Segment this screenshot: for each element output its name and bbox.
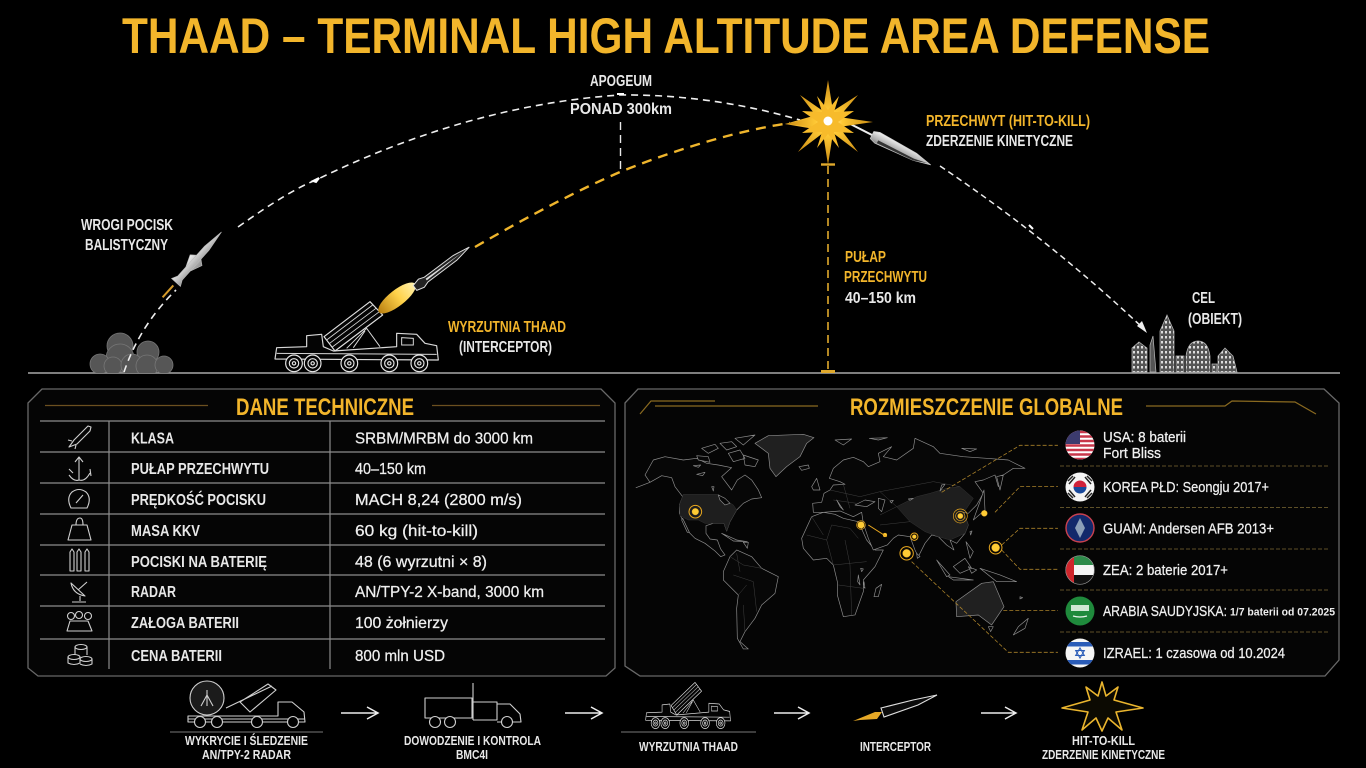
step 5: hit-to-kill: HIT-TO-KILL xyxy=(1072,733,1135,748)
panel: technical data xyxy=(28,389,615,676)
interceptor trajectory xyxy=(475,123,790,247)
row: missile speed: MACH 8,24 (2800 m/s) xyxy=(355,492,522,509)
row: missile speed: PRĘDKOŚĆ POCISKU xyxy=(131,490,266,509)
trajectory tick marks xyxy=(313,94,1033,229)
row: battery crew: ZAŁOGA BATERII xyxy=(131,615,239,632)
enemy missile xyxy=(157,227,227,303)
row: battery price: 800 mln USD xyxy=(355,648,445,665)
icon: missiles xyxy=(70,549,89,571)
panel heading: ROZMIESZCZENIE GLOBALNE xyxy=(850,394,1123,421)
flag: Guam xyxy=(1066,514,1094,542)
icon: altitude arrow xyxy=(69,457,91,480)
descending debris missile xyxy=(848,119,934,170)
apogee label: PONAD 300km xyxy=(570,101,672,118)
row: battery price xyxy=(131,648,445,665)
step 1: radar truck: WYKRYCIE I ŚLEDZENIE xyxy=(185,733,308,748)
row: KKV mass xyxy=(131,523,478,540)
row: class: KLASA xyxy=(131,430,174,448)
label: Israel: IZRAEL: 1 czasowa od 10.2024 xyxy=(1103,645,1285,662)
Americas and Greenland xyxy=(636,434,814,649)
icon: missile xyxy=(68,426,91,449)
row: radar: AN/TPY-2 X-band, 3000 km xyxy=(355,584,544,601)
list separators xyxy=(1060,466,1330,632)
step 3: launcher: WYRZUTNIA THAAD xyxy=(639,739,738,754)
flag: Saudi Arabia xyxy=(1066,596,1094,626)
launcher label xyxy=(448,319,566,356)
row: radar: RADAR xyxy=(131,584,176,601)
panel heading: DANE TECHNICZNE xyxy=(236,394,414,421)
row: intercept altitude xyxy=(131,461,426,478)
flag: Israel xyxy=(1065,638,1095,668)
row: radar xyxy=(131,584,544,601)
panel: global deployment xyxy=(625,389,1339,676)
intercept altitude label xyxy=(844,249,927,307)
intercept altitude label: PRZECHWYTU xyxy=(844,269,927,286)
label: USA: Fort Bliss xyxy=(1103,445,1161,462)
label: Saudi Arabia: 1/7 baterii od 07.2025 xyxy=(1230,606,1335,618)
descending arrowhead xyxy=(1137,321,1147,333)
step 3: launcher xyxy=(621,682,756,754)
apogee label: APOGEUM xyxy=(590,73,652,90)
flag: South Korea xyxy=(1065,472,1095,502)
label: Guam: GUAM: Andersen AFB 2013+ xyxy=(1103,520,1274,538)
row: battery price: CENA BATERII xyxy=(131,648,222,665)
row: battery crew xyxy=(131,615,448,632)
target label xyxy=(1188,290,1242,328)
descending trajectory xyxy=(940,166,1145,330)
step 2: command truck: BMC4I xyxy=(456,747,488,762)
panel frame xyxy=(28,389,615,676)
step 1: radar truck xyxy=(170,681,323,762)
label: Saudi Arabia: ARABIA SAUDYJSKA: xyxy=(1103,603,1227,620)
intercept label: ZDERZENIE KINETYCZNE xyxy=(926,133,1073,150)
world map xyxy=(636,434,1058,652)
row: KKV mass: 60 kg (hit-to-kill) xyxy=(355,523,478,540)
interceptor missile xyxy=(412,243,472,292)
target label: CEL xyxy=(1192,290,1215,307)
process flow xyxy=(170,681,1165,762)
row: KKV mass: MASA KKV xyxy=(131,523,200,540)
launcher label: WYRZUTNIA THAAD xyxy=(448,319,566,336)
step 5: hit-to-kill xyxy=(1042,682,1165,762)
step 2: command truck xyxy=(404,683,541,762)
target city skyline xyxy=(1132,315,1237,372)
flag: UAE xyxy=(1065,555,1095,585)
row: missiles per battery xyxy=(131,554,487,571)
row: class: SRBM/MRBM do 3000 km xyxy=(355,430,533,448)
intercept label: PRZECHWYT (HIT-TO-KILL) xyxy=(926,113,1090,130)
row: missiles per battery: POCISKI NA BATERIĘ xyxy=(131,554,267,571)
callout lines xyxy=(912,445,1058,652)
intercept altitude label: PUŁAP xyxy=(845,249,886,266)
step 2: command truck: DOWODZENIE I KONTROLA xyxy=(404,733,541,748)
step 5: hit-to-kill: ZDERZENIE KINETYCZNE xyxy=(1042,747,1165,762)
enemy missile label: WROGI POCISK xyxy=(81,217,173,234)
icon: crew xyxy=(67,612,92,631)
apogee altitude marker xyxy=(620,122,622,172)
intercept altitude line xyxy=(821,164,835,372)
label: Saudi Arabia xyxy=(1103,603,1335,620)
icon: radar dish xyxy=(71,582,87,602)
row: missiles per battery: 48 (6 wyrzutni × 8) xyxy=(355,554,487,571)
label: UAE: ZEA: 2 baterie 2017+ xyxy=(1103,562,1228,579)
row: battery crew: 100 żołnierzy xyxy=(355,615,448,632)
explosion xyxy=(785,80,873,165)
enemy missile label xyxy=(81,217,173,254)
label: South Korea: KOREA PŁD: Seongju 2017+ xyxy=(1103,479,1269,496)
trajectory diagram xyxy=(28,73,1340,377)
step 4: interceptor xyxy=(853,695,937,754)
arrow 1 xyxy=(341,707,378,719)
arrow 4 xyxy=(981,707,1016,719)
enemy trajectory ascending xyxy=(124,95,800,372)
intercept altitude label: 40–150 km xyxy=(845,290,916,307)
flag: USA xyxy=(1065,430,1095,460)
panel frame xyxy=(625,389,1339,676)
step 4: interceptor: INTERCEPTOR xyxy=(860,739,931,754)
deployment markers xyxy=(689,505,1002,560)
apogee label xyxy=(570,73,672,118)
intercept label xyxy=(926,113,1090,150)
target label: (OBIEKT) xyxy=(1188,311,1242,328)
arrow 3 xyxy=(774,707,809,719)
arrow 2 xyxy=(565,707,602,719)
ground line xyxy=(28,372,1340,374)
row: class xyxy=(131,430,533,448)
enemy missile label: BALISTYCZNY xyxy=(85,237,168,254)
row: intercept altitude: PUŁAP PRZECHWYTU xyxy=(131,461,269,478)
step 1: radar truck: AN/TPY-2 RADAR xyxy=(202,747,291,762)
icon: weight xyxy=(68,518,91,540)
label: USA: USA: 8 baterii xyxy=(1103,429,1186,446)
THAAD launcher truck xyxy=(275,302,438,372)
label: USA xyxy=(1103,429,1186,462)
row: missile speed xyxy=(131,490,522,509)
launcher label: (INTERCEPTOR) xyxy=(459,339,552,356)
launch flame xyxy=(374,278,420,318)
row: intercept altitude: 40–150 km xyxy=(355,461,426,478)
icon: coins xyxy=(68,644,92,666)
Africa Eurasia Oceania xyxy=(802,438,1028,635)
enemy launch smoke cloud xyxy=(90,333,173,377)
icon: speedometer xyxy=(69,490,89,508)
